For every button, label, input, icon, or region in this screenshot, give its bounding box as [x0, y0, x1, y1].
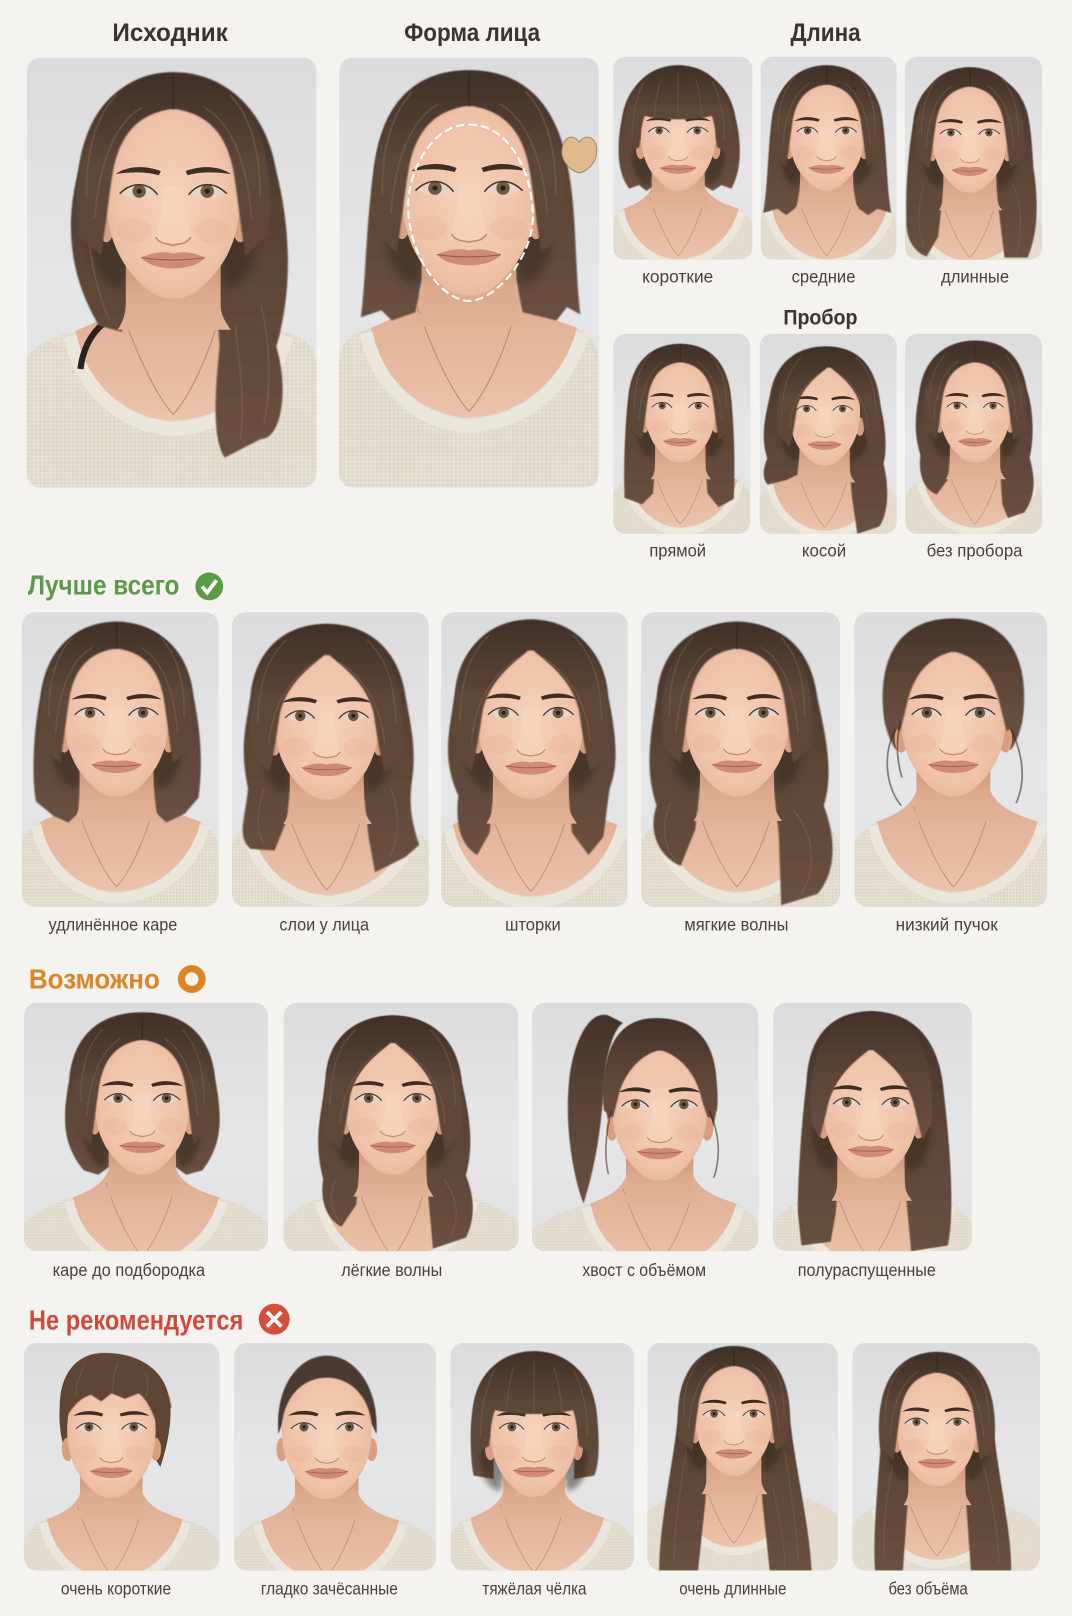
card: side parting — [760, 334, 897, 561]
card: light waves: лёгкие волны — [341, 1260, 442, 1280]
card: light waves — [284, 1003, 519, 1280]
heading: source: Исходник — [112, 20, 228, 47]
card: low bun — [854, 612, 1047, 935]
card: face layers: слои у лица — [279, 915, 369, 935]
face outline: dashed — [408, 125, 533, 301]
heading: face shape: Форма лица — [404, 20, 540, 47]
card: long bob — [22, 612, 219, 935]
card: long bob: удлинённое каре — [49, 915, 177, 935]
card: heavy fringe: тяжёлая чёлка — [482, 1578, 587, 1598]
heading: possible: Возможно — [29, 963, 160, 994]
card: no volume: без объёма — [888, 1578, 968, 1598]
card: half-up — [773, 1003, 972, 1280]
card: chin bob — [24, 1003, 268, 1280]
card: soft waves: мягкие волны — [684, 915, 789, 935]
heading: length: Длина — [791, 20, 861, 47]
card: medium length — [761, 57, 897, 286]
card: voluminous ponytail — [532, 1003, 759, 1280]
heading: parting: Пробор — [783, 305, 858, 330]
card: short length: короткие — [642, 266, 713, 286]
card: soft waves — [641, 612, 840, 935]
card: curtains: шторки — [505, 915, 561, 935]
card: very long: очень длинные — [679, 1578, 786, 1598]
card: heavy fringe — [450, 1343, 634, 1598]
card: face layers — [232, 612, 429, 935]
icon: green check — [195, 573, 223, 600]
panel: face shape — [339, 20, 599, 487]
card: slicked back: гладко зачёсанные — [261, 1578, 398, 1598]
section: not recommended — [24, 1304, 1040, 1598]
card: low bun: низкий пучок — [896, 915, 998, 935]
card: no volume — [852, 1343, 1040, 1598]
card: slicked back — [234, 1343, 436, 1598]
card: straight parting: прямой — [649, 541, 706, 561]
portrait: face shape — [339, 58, 599, 487]
card: medium length: средние — [792, 266, 855, 286]
heading: not recommended: Не рекомендуется — [29, 1304, 243, 1335]
icon: red cross — [259, 1304, 290, 1335]
panel: length — [613, 20, 1042, 286]
card: half-up: полураспущенные — [798, 1260, 936, 1280]
card: very short — [24, 1343, 220, 1598]
icon: heart face shape — [562, 137, 597, 173]
section: possible — [24, 963, 972, 1280]
card: straight parting — [613, 334, 750, 561]
portrait: source — [27, 58, 316, 487]
card: voluminous ponytail: хвост с объёмом — [582, 1260, 706, 1280]
card: very long — [647, 1343, 838, 1598]
panel: parting — [613, 305, 1042, 561]
card: no parting — [905, 334, 1042, 561]
panel: source photo — [27, 20, 316, 487]
card: no parting: без пробора — [927, 541, 1023, 561]
card: long length: длинные — [941, 266, 1009, 286]
card: chin bob: каре до подбородка — [53, 1260, 205, 1280]
card: side parting: косой — [802, 541, 846, 561]
section: best — [22, 570, 1047, 935]
icon: orange ring — [181, 969, 202, 989]
heading: best: Лучше всего — [28, 570, 179, 601]
card: very short: очень короткие — [61, 1578, 171, 1598]
card: curtains — [441, 612, 628, 935]
card: short length — [613, 57, 753, 286]
card: long length — [905, 57, 1042, 286]
